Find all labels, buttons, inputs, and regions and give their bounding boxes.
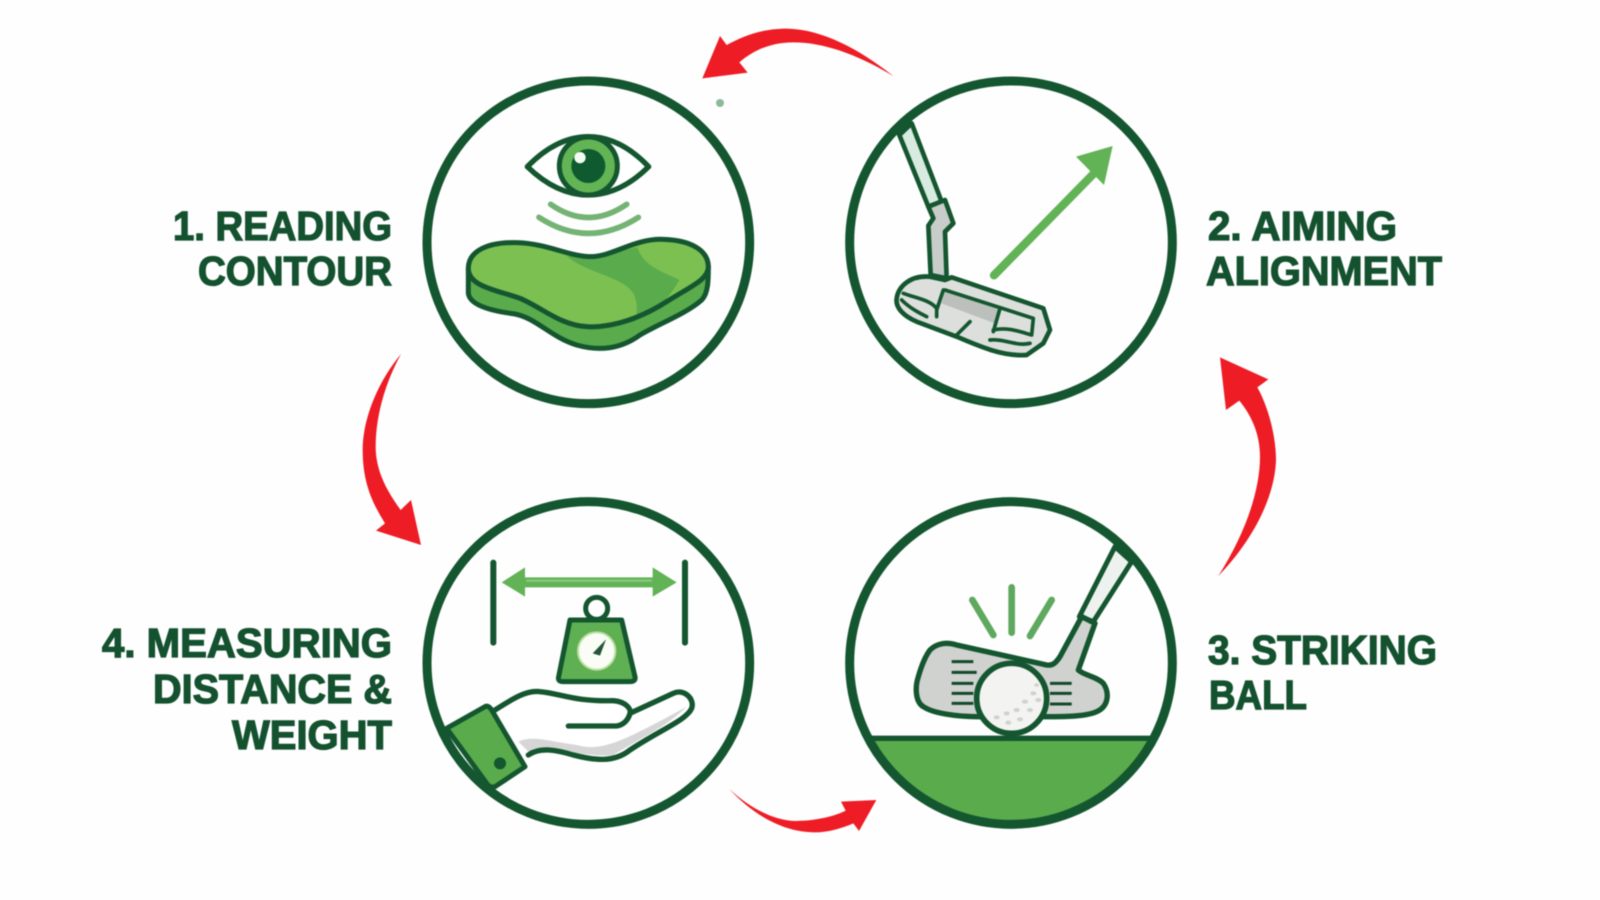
- heading: 3. Striking Ball: 3. STRIKING: [1208, 627, 1437, 673]
- icon: putter shaft and head: [916, 547, 1132, 717]
- heading: 1. Reading Contour: CONTOUR: [198, 248, 392, 294]
- icon: contour green: [468, 239, 708, 348]
- arrow: top, step 2 to step 1: [702, 29, 893, 78]
- ring: [850, 502, 1172, 824]
- heading: 4. Measuring Distance & Weight: WEIGHT: [232, 712, 392, 758]
- heading: 4. Measuring Distance & Weight: 4. MEASURING: [102, 620, 392, 666]
- heading: 1. Reading Contour: 1. READING: [173, 203, 392, 249]
- arrow: bottom, step 4 to step 3: [729, 789, 876, 832]
- icon: sight waves: [539, 204, 638, 233]
- heading: 2. Aiming Alignment: [1206, 203, 1442, 294]
- icon: distance arrow: [502, 567, 677, 597]
- panel: step 1 reading contour: [427, 81, 750, 404]
- icon: distance markers: [493, 563, 685, 643]
- heading: 2. Aiming Alignment: ALIGNMENT: [1206, 248, 1442, 294]
- heading: 4. Measuring Distance & Weight: [102, 620, 392, 758]
- icon: ground line: [869, 730, 1153, 746]
- icon: sleeve cuff: [447, 706, 525, 787]
- heading: 2. Aiming Alignment: 2. AIMING: [1208, 203, 1397, 249]
- icon: kettle weight: [558, 597, 635, 682]
- heading: 1. Reading Contour: [173, 203, 392, 294]
- ring: [427, 502, 750, 824]
- panel: step 3 striking ball: [850, 502, 1172, 824]
- ring: [850, 81, 1172, 404]
- speck: [716, 99, 724, 107]
- ring: [427, 81, 750, 404]
- icon: open hand: [495, 691, 692, 759]
- arrow: right, step 3 to step 2: [1218, 357, 1276, 576]
- icon: eye: [527, 137, 649, 195]
- icon: putter: [896, 123, 1050, 355]
- arrow: left, step 1 to step 4: [363, 354, 421, 545]
- panel: step 2 aiming alignment: [850, 81, 1172, 404]
- icon: green ground: [869, 738, 1153, 824]
- panel: step 4 measuring distance and weight: [427, 502, 750, 824]
- heading: 3. Striking Ball: [1208, 627, 1437, 718]
- icon: aim arrow: [994, 146, 1113, 275]
- heading: 4. Measuring Distance & Weight: DISTANCE &: [153, 666, 392, 712]
- heading: 3. Striking Ball: BALL: [1209, 672, 1307, 718]
- icon: golf ball: [977, 663, 1047, 733]
- icon: impact rays: [972, 587, 1052, 636]
